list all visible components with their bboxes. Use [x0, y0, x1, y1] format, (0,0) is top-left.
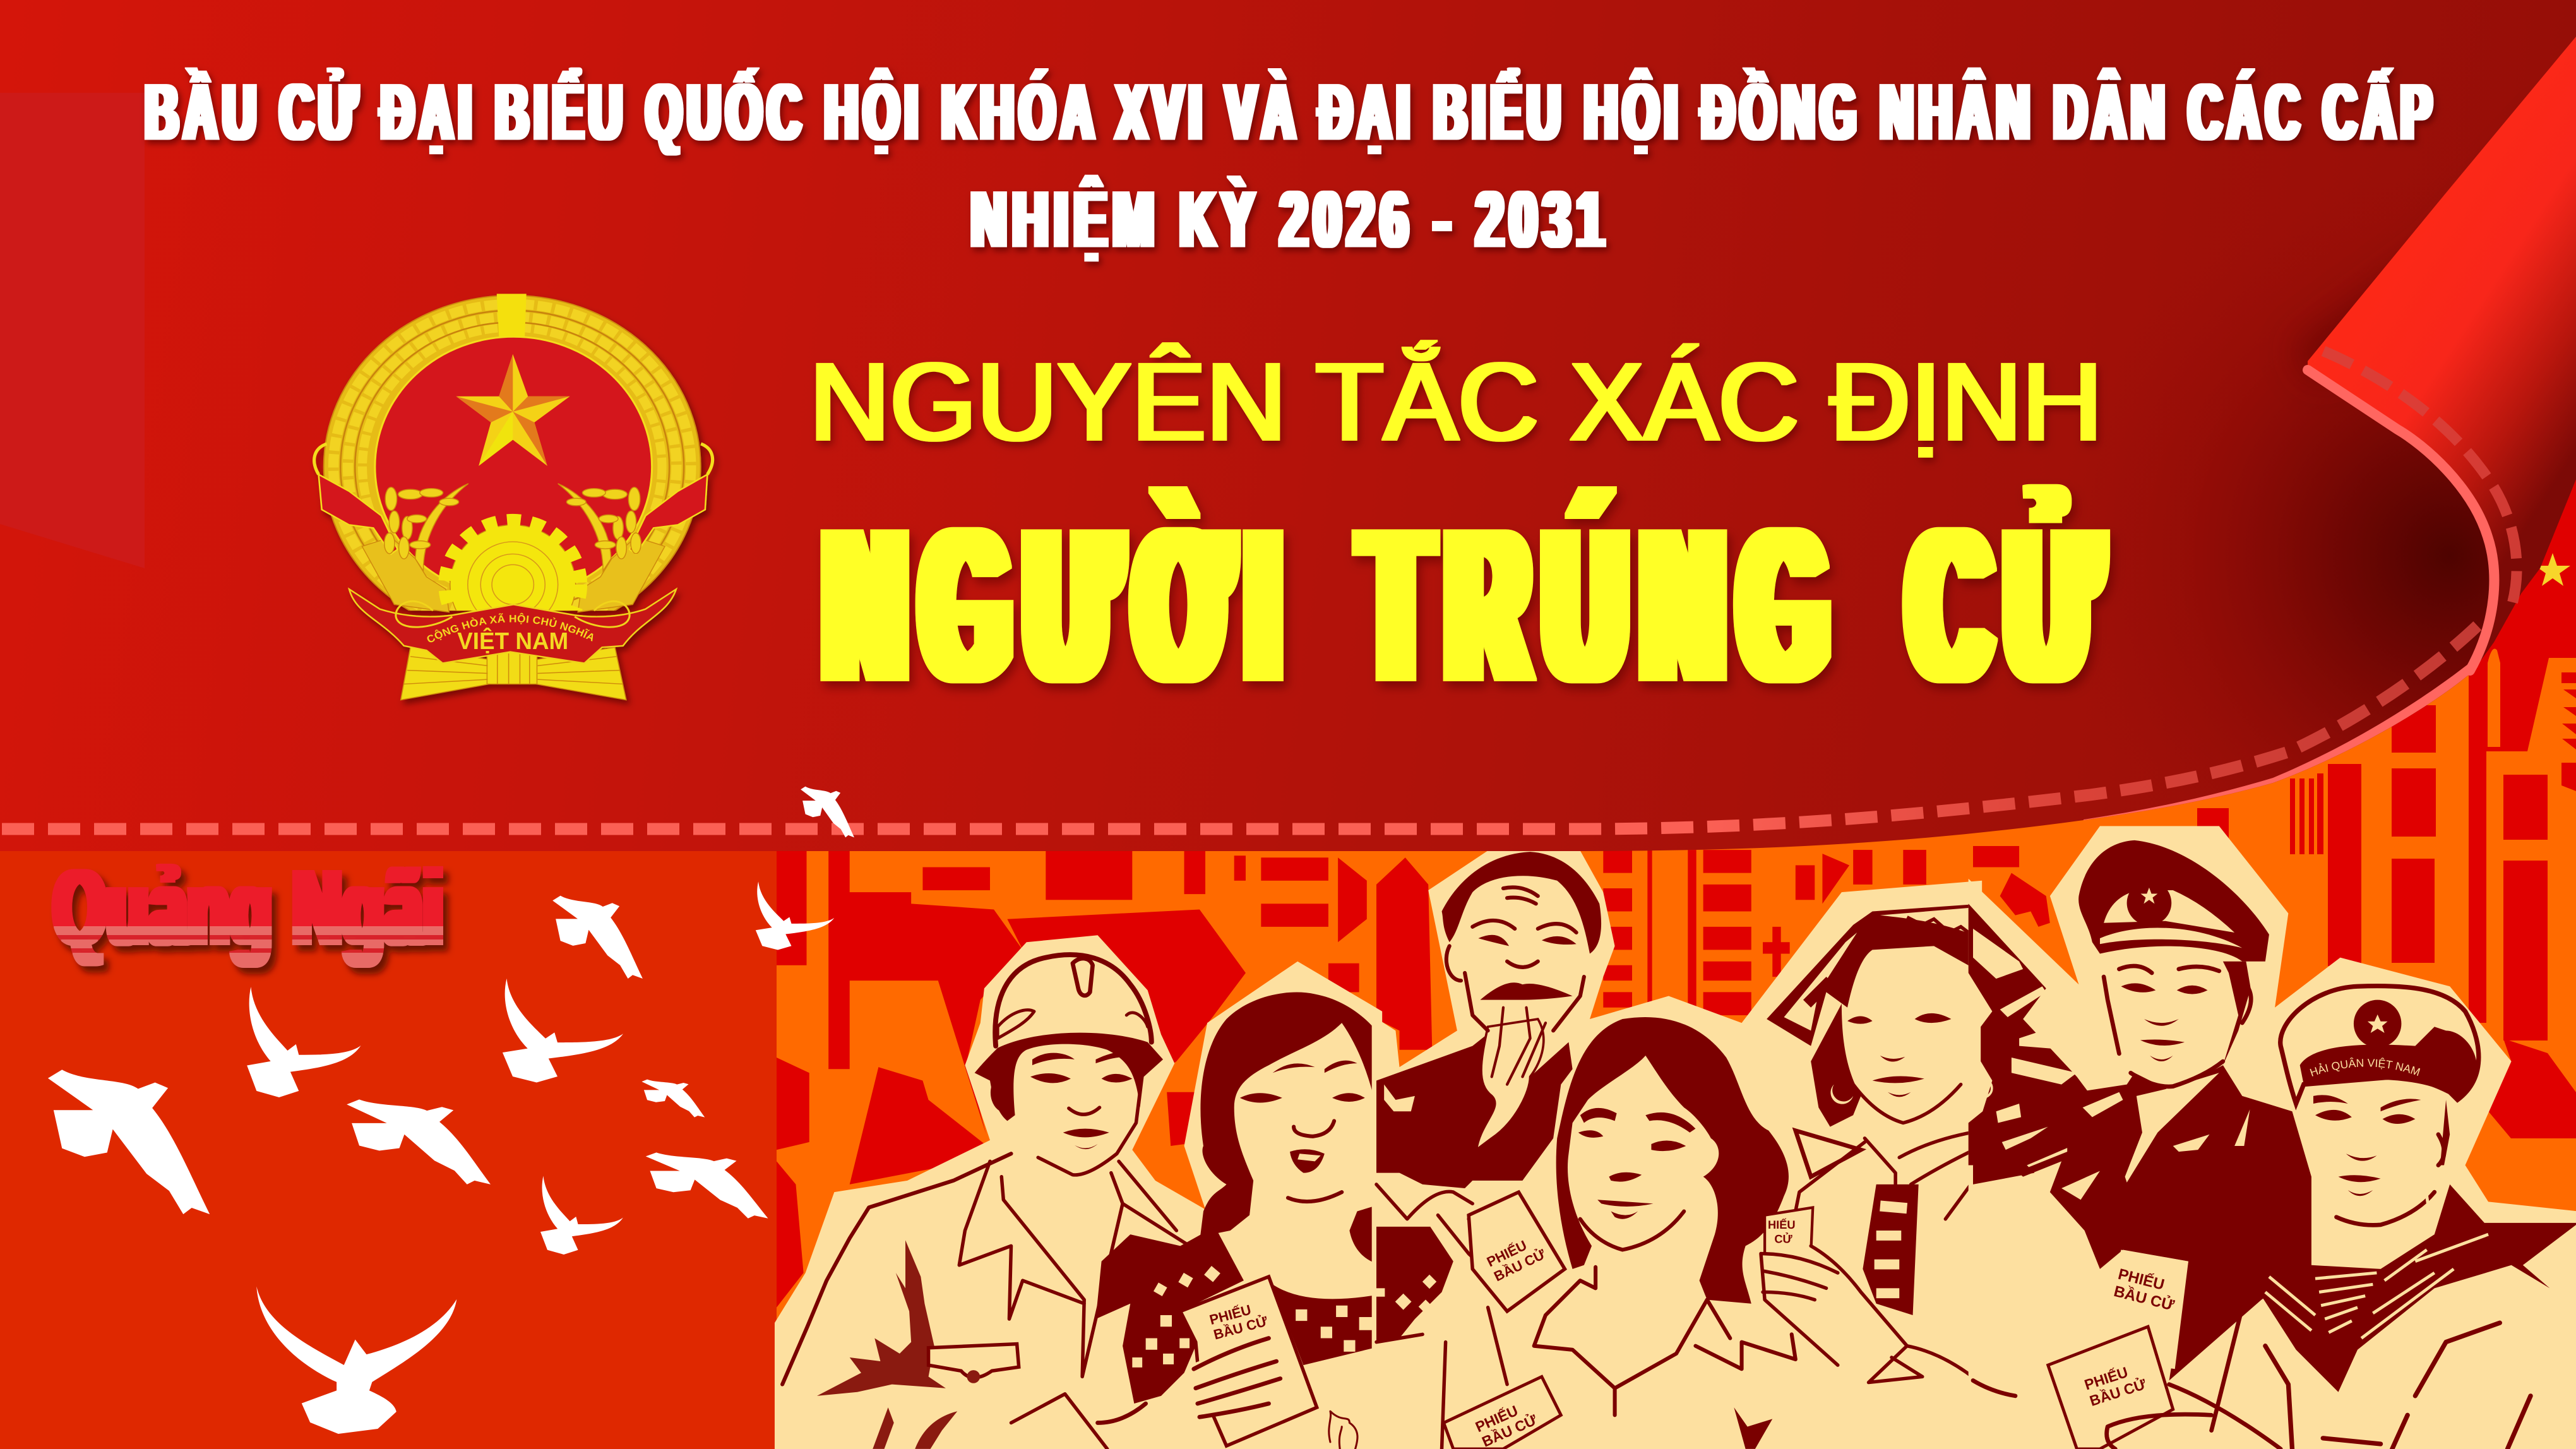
ribbon text: CỘNG HÒA XÃ HỘI CHỦ NGHĨA	[427, 612, 593, 643]
side ribbons	[314, 444, 713, 554]
old man with beard	[1376, 852, 1601, 1188]
curled corner fold	[2308, 37, 2576, 671]
sailor	[2263, 984, 2576, 1449]
dove flock	[48, 787, 854, 1434]
dove 4	[641, 1080, 705, 1118]
red banner with curled corner	[0, 0, 2576, 884]
dove 2	[347, 1099, 491, 1184]
sheaf base	[401, 647, 626, 700]
lower wreath fill	[362, 537, 665, 612]
star	[456, 354, 570, 466]
arm, sleeve and ballot	[1376, 1184, 1565, 1449]
dove 5	[646, 1152, 768, 1219]
ballot paper	[1180, 1277, 1317, 1446]
gear	[438, 514, 587, 611]
ethnic woman: HIẾU	[1768, 1219, 1796, 1231]
top wreath binding	[497, 294, 527, 337]
ethnic woman hat pattern	[1969, 903, 2089, 1177]
dashes on fold	[2323, 351, 2517, 606]
rice sprigs	[385, 484, 641, 571]
fold highlighted edge	[2308, 370, 2494, 671]
dove 8	[503, 979, 623, 1083]
silhouette: police and sailor	[1969, 826, 2576, 1449]
dove 6 over stitch line	[801, 787, 854, 837]
arm, sleeve and ballot: PHIẾU	[1484, 1237, 1529, 1270]
ethnic woman: CỬ	[1774, 1232, 1792, 1246]
silhouette: worker and woman	[775, 935, 1382, 1449]
banner background	[0, 0, 2576, 851]
dove 7	[247, 987, 361, 1097]
ethnic woman	[1761, 903, 1982, 1385]
title line 2: NHIỆM KỲ 2026 - 2031	[971, 174, 1610, 264]
arm, sleeve and ballot: BẦU CỬ	[1491, 1246, 1548, 1284]
two ballot papers: PHIẾU	[2082, 1364, 2130, 1393]
sailor: HẢI QUÂN VIỆT NAM	[2310, 1058, 2421, 1076]
dove 9	[756, 881, 834, 950]
flag star	[2535, 553, 2570, 586]
silhouette: middle figures	[1372, 850, 1982, 1449]
stitched dash line	[2, 625, 2478, 829]
logo: Quảng Ngãi: Quảng Ngãi	[54, 848, 444, 968]
dove 10	[540, 1176, 623, 1255]
national emblem	[312, 294, 721, 707]
young woman in front: PHIẾU	[1473, 1402, 1520, 1436]
two ballot papers: BẦU CỬ	[2112, 1282, 2176, 1314]
heading: nguyên tắc xác định: NGUYÊN TẮC XÁC ĐỊNH	[809, 340, 2102, 464]
police officer	[1973, 840, 2311, 1381]
two ballot papers: BẦU CỬ	[2087, 1375, 2149, 1409]
ribbon with nation name: VIỆT NAM	[457, 628, 568, 654]
two ballot papers	[1973, 1249, 2281, 1449]
ballot paper: PHIẾU	[1208, 1301, 1253, 1328]
wreath	[324, 295, 701, 638]
left lighter strip	[0, 93, 145, 568]
left red panel	[0, 846, 780, 1449]
dove 1	[48, 1070, 210, 1214]
two ballot papers: PHIẾU	[2116, 1265, 2166, 1293]
young woman in front	[1444, 1017, 1796, 1449]
worker figure	[782, 955, 1196, 1449]
ballot paper: BẦU CỬ	[1212, 1313, 1269, 1342]
propaganda poster background	[777, 442, 2576, 1449]
people group: old man and young woman	[1372, 850, 1982, 1449]
dove 3	[552, 896, 643, 979]
dove 11 large	[256, 1287, 456, 1434]
shadow under fold	[2177, 247, 2576, 772]
people group: worker and woman	[775, 935, 1382, 1449]
woman with dark hair	[1095, 993, 1382, 1449]
ribbon with nation name	[348, 564, 683, 688]
people group: soldiers	[1969, 826, 2576, 1449]
